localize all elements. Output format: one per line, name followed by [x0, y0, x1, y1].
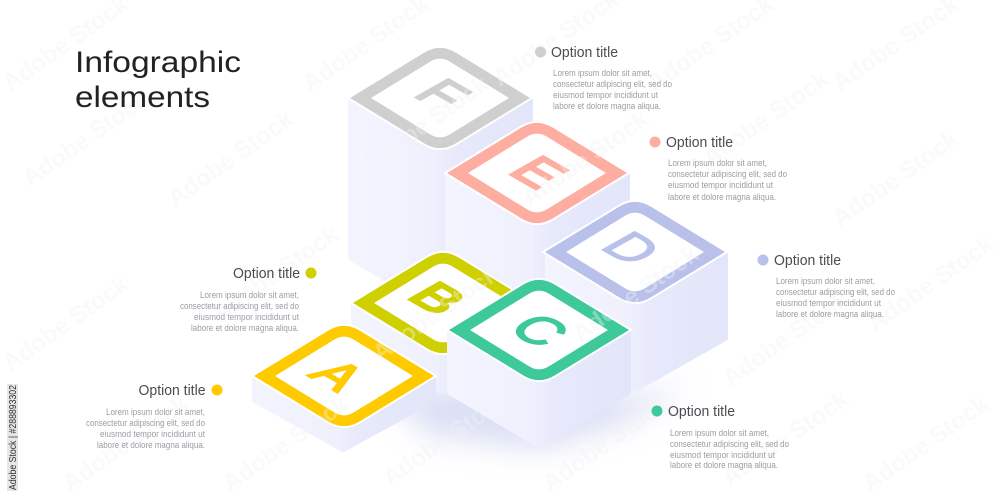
option F: consectetur adipiscing elit, sed do [553, 79, 672, 89]
letter E: E [496, 149, 580, 196]
watermark: Adobe Stock [358, 70, 494, 177]
option F: labore et dolore magna aliqua. [553, 101, 661, 111]
option A: labore et dolore magna aliqua. [97, 440, 205, 450]
option D: Lorem ipsum dolor sit amet, [776, 276, 875, 286]
option A: Option title [138, 383, 206, 399]
watermark: Adobe Stock [58, 390, 194, 497]
option A: consectetur adipiscing elit, sed do [86, 418, 205, 428]
option D: consectetur adipiscing elit, sed do [776, 287, 895, 297]
watermark: Adobe Stock [828, 125, 964, 232]
block F [350, 48, 530, 310]
option B: Option title [233, 266, 300, 282]
letter F: F [402, 72, 483, 117]
watermark: Adobe Stock [718, 285, 854, 392]
option E [650, 135, 787, 202]
title [75, 46, 241, 114]
option B: consectetur adipiscing elit, sed do [180, 301, 299, 311]
watermark: Adobe Stock [718, 385, 854, 492]
option E: labore et dolore magna aliqua. [668, 192, 776, 202]
option B: eiusmod tempor incididunt ut [194, 312, 300, 322]
letter B: B [394, 274, 480, 323]
option F: Lorem ipsum dolor sit amet, [553, 68, 652, 78]
block A [254, 326, 434, 449]
watermark: Adobe Stock [18, 85, 154, 192]
option F: Option title [551, 45, 618, 61]
watermark: Adobe Stock [538, 390, 674, 497]
block C [449, 280, 629, 445]
watermark: Adobe Stock [0, 270, 134, 377]
letter A: A [297, 353, 378, 398]
option B: labore et dolore magna aliqua. [191, 323, 299, 333]
watermark: Adobe Stock [568, 240, 704, 347]
option F [535, 45, 672, 111]
block D [545, 202, 725, 389]
title: Infographic [75, 46, 241, 79]
block B [353, 253, 533, 391]
option C: eiusmod tempor incididunt ut [670, 450, 776, 460]
option F: eiusmod tempor incididunt ut [553, 90, 659, 100]
letter D: D [588, 224, 674, 273]
option A [86, 383, 222, 450]
watermark: Adobe Stock [858, 390, 994, 497]
option C: consectetur adipiscing elit, sed do [670, 439, 789, 449]
option E: eiusmod tempor incididunt ut [668, 180, 774, 190]
watermark: Adobe Stock [218, 390, 354, 497]
stock id label: Adobe Stock | #288893302 [7, 385, 19, 490]
option D: Option title [774, 253, 841, 269]
option E: Lorem ipsum dolor sit amet, [668, 158, 767, 168]
watermark: Adobe Stock [698, 65, 834, 172]
option C [652, 404, 789, 470]
option C: Lorem ipsum dolor sit amet, [670, 428, 769, 438]
option D [758, 253, 895, 319]
option D: eiusmod tempor incididunt ut [776, 298, 882, 308]
watermark: Adobe Stock [163, 105, 299, 212]
watermark: Adobe Stock [368, 260, 504, 367]
ground shadow [385, 385, 690, 450]
block E [447, 123, 627, 365]
option A: Lorem ipsum dolor sit amet, [106, 407, 205, 417]
option A: eiusmod tempor incididunt ut [100, 429, 206, 439]
title: elements [75, 81, 210, 114]
option B: Lorem ipsum dolor sit amet, [200, 290, 299, 300]
watermark: Adobe Stock [378, 385, 514, 492]
option C: Option title [668, 404, 735, 420]
option D: labore et dolore magna aliqua. [776, 309, 884, 319]
watermark: Adobe Stock [208, 220, 344, 327]
option E: consectetur adipiscing elit, sed do [668, 169, 787, 179]
letter C: C [496, 306, 582, 355]
option E: Option title [666, 135, 733, 151]
option C: labore et dolore magna aliqua. [670, 460, 778, 470]
watermark: Adobe Stock [863, 230, 999, 337]
watermark: Adobe Stock [518, 105, 654, 212]
option B [180, 266, 316, 333]
